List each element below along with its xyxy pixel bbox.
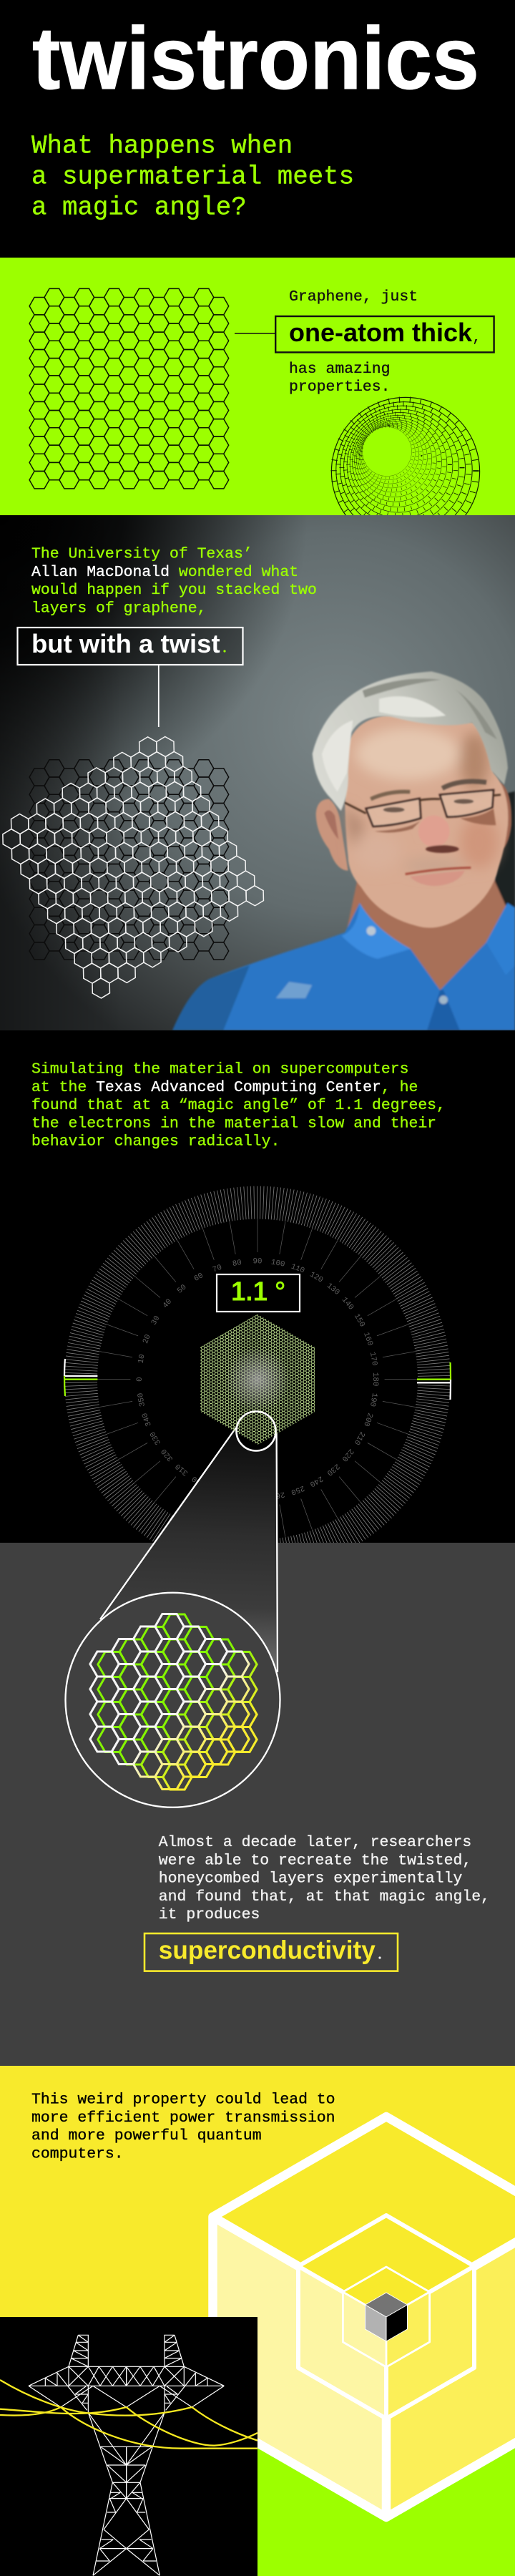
text: simulating the material: at the xyxy=(31,1079,96,1096)
callout: one-atom thick: , xyxy=(472,329,481,346)
callout: superconductivity xyxy=(144,1933,398,1971)
black honeycomb layer xyxy=(29,760,229,960)
protractor degree labels: 310 xyxy=(174,1461,190,1477)
angle label box xyxy=(217,1274,300,1312)
text: almost a decade later: it produces xyxy=(159,1906,260,1923)
callout: superconductivity: superconductivity xyxy=(159,1936,376,1965)
protractor degree labels: 260 xyxy=(270,1490,285,1501)
lens circle small xyxy=(236,1411,276,1451)
connector line xyxy=(158,665,160,727)
protractor degree labels: 0 xyxy=(136,1377,144,1382)
protractor degree labels: 270 xyxy=(250,1493,265,1501)
text: has amazing properties: properties. xyxy=(289,379,391,396)
text: almost a decade later: Almost a decade later, researchers xyxy=(159,1834,471,1851)
heading: twistronics: twistronics xyxy=(32,10,479,108)
zoom cone xyxy=(100,1428,278,1672)
text: weird property: computers. xyxy=(31,2145,124,2162)
text: University of Texas: would happen if you stacked two xyxy=(31,582,317,599)
protractor degree labels xyxy=(136,1258,379,1501)
protractor degree labels: 10 xyxy=(137,1354,147,1365)
text: almost a decade later: honeycombed layers experimentally xyxy=(159,1870,462,1888)
protractor degree labels: 30 xyxy=(150,1314,162,1327)
moire hexagon xyxy=(200,1314,315,1445)
green yellow lattice layer xyxy=(98,1614,257,1790)
protractor degree labels: 20 xyxy=(142,1333,153,1345)
panel: superconductivity xyxy=(0,1314,515,2066)
protractor dial xyxy=(64,1203,451,1556)
portrait: soft face shading xyxy=(343,728,499,873)
icon: transmission tower xyxy=(29,2335,224,2575)
protractor degree labels: 190 xyxy=(368,1392,378,1407)
protractor degree labels: 280 xyxy=(230,1490,245,1501)
panel: applications xyxy=(0,2066,515,2576)
yellow fade on green layer xyxy=(126,1651,258,1790)
protractor degree labels: 200 xyxy=(361,1411,374,1428)
green ground xyxy=(258,2433,515,2576)
twisted white honeycomb layer xyxy=(0,727,268,1001)
magnified lens xyxy=(66,1593,280,1807)
connector line xyxy=(235,333,275,334)
icon: nested quantum cubes xyxy=(213,2117,515,2517)
protractor degree labels: 110 xyxy=(290,1263,305,1275)
text: almost a decade later: and found that, at that magic angle, xyxy=(159,1888,490,1906)
text: weird property: and more powerful quantum xyxy=(31,2127,262,2145)
protractor degree labels: 340 xyxy=(141,1411,154,1428)
protractor degree labels: 100 xyxy=(270,1258,285,1269)
panel: graphene xyxy=(0,258,515,515)
protractor degree labels: 290 xyxy=(210,1483,225,1496)
protractor degree labels: 170 xyxy=(368,1352,378,1367)
text: simulating the material: the electrons in the material slow and their xyxy=(31,1115,436,1132)
protractor degree labels: 300 xyxy=(191,1474,207,1488)
right needle xyxy=(417,1362,451,1400)
left needle xyxy=(64,1359,97,1396)
text: simulating the material: Texas Advanced Computing Center, he xyxy=(96,1079,418,1096)
protractor degree labels: 60 xyxy=(192,1272,205,1284)
protractor degree labels: 350 xyxy=(137,1392,147,1407)
icon: rolled graphene nanotube xyxy=(330,396,481,515)
text: University of Texas: wondered what xyxy=(170,564,298,581)
protractor degree labels: 120 xyxy=(308,1271,324,1285)
honeycomb lattice xyxy=(29,288,229,489)
protractor degree labels: 320 xyxy=(160,1447,175,1463)
protractor degree labels: 230 xyxy=(325,1461,341,1477)
subtitle question: What happens when xyxy=(31,132,293,160)
text: University of Texas: layers of graphene, xyxy=(31,600,206,617)
icon: small dark cube xyxy=(365,2293,408,2341)
protractor degree labels: 180 xyxy=(371,1372,379,1386)
text: has amazing properties: has amazing xyxy=(289,361,391,378)
protractor degree labels: 210 xyxy=(352,1430,366,1446)
text: graphene just: Graphene, just xyxy=(289,288,418,306)
angle label box: 1.1 ° xyxy=(231,1277,285,1307)
callout: but with a twist: but with a twist xyxy=(31,629,220,658)
callout: one-atom thick: one-atom thick xyxy=(289,318,473,347)
panel: magic angle simulation xyxy=(0,1030,515,1556)
callout: but with a twist xyxy=(17,628,243,665)
text: University of Texas: Allan MacDonald xyxy=(31,564,170,581)
protractor degree labels: 80 xyxy=(232,1259,242,1269)
protractor degree labels: 130 xyxy=(325,1282,341,1297)
yellow fade on white layer xyxy=(123,1650,250,1790)
protractor degree labels: 140 xyxy=(340,1296,355,1312)
subtitle question: a supermaterial meets xyxy=(31,162,354,192)
text: simulating the material: found that at a “magic angle” of 1.1 degrees, xyxy=(31,1097,446,1114)
protractor degree labels: 330 xyxy=(149,1430,163,1446)
panel: power transmission xyxy=(0,2317,258,2576)
protractor degree labels: 40 xyxy=(162,1297,174,1310)
white lattice layer xyxy=(90,1614,249,1789)
callout: one-atom thick xyxy=(275,316,494,352)
protractor degree labels: 250 xyxy=(290,1483,305,1496)
panel: title xyxy=(0,0,515,258)
protractor degree labels: 50 xyxy=(176,1283,188,1296)
text: almost a decade later: were able to recreate the twisted, xyxy=(159,1852,471,1869)
text: weird property: This weird property could lead to xyxy=(31,2092,335,2109)
zoom cone edges xyxy=(100,1428,278,1672)
text: simulating the material: behavior changes radically. xyxy=(31,1133,280,1151)
protractor degree labels: 240 xyxy=(308,1474,324,1488)
subtitle question: a magic angle? xyxy=(31,193,247,222)
lens circle outline xyxy=(236,1411,276,1451)
panel: Allan MacDonald photo xyxy=(0,515,515,1030)
power lines xyxy=(0,2380,258,2449)
text: simulating the material: Simulating the material on supercomputers xyxy=(31,1061,408,1078)
text: University of Texas: The University of Texas’ xyxy=(31,546,252,563)
text: weird property: more efficient power transmission xyxy=(31,2109,335,2127)
protractor degree labels: 150 xyxy=(352,1312,366,1329)
photo: portrait of Allan MacDonald xyxy=(172,671,515,1030)
protractor degree labels: 220 xyxy=(340,1447,355,1463)
protractor degree labels: 90 xyxy=(253,1258,262,1267)
portrait: facial features xyxy=(313,671,508,886)
protractor degree labels: 70 xyxy=(212,1264,223,1274)
protractor degree labels: 160 xyxy=(361,1331,374,1347)
